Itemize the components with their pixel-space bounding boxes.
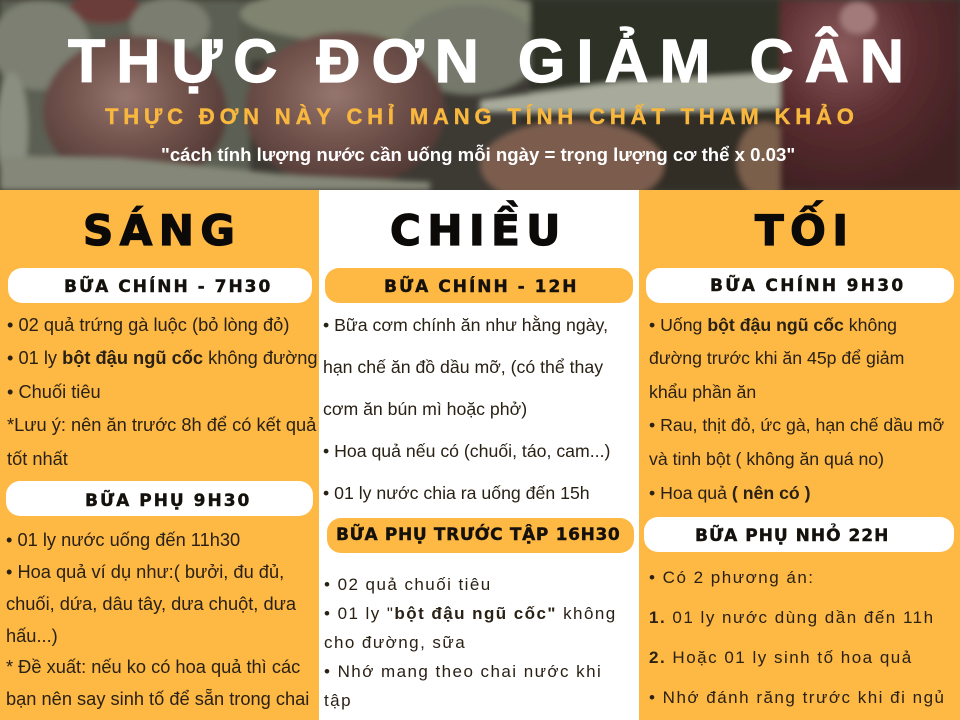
pill: afternoon snack: [327, 518, 634, 553]
text: morning snack: [6, 529, 309, 709]
pill label: evening snack: BỮA PHỤ NHỎ 22H: [695, 526, 889, 546]
text: morning snack: • Hoa quả ví dụ như:( bưởi, đu đủ,: [6, 561, 284, 582]
text: morning main meal: tốt nhất: [7, 448, 68, 469]
subtitle: THỰC ĐƠN NÀY CHỈ MANG TÍNH CHẤT THAM KHẢO: [105, 104, 859, 129]
text: afternoon snack: • Nhớ mang theo chai nước khi: [324, 662, 602, 681]
pill: morning snack: [6, 481, 313, 516]
pill: afternoon main meal: [325, 268, 633, 303]
text: morning snack: bạn nên say sinh tố để sẵn trong chai: [6, 688, 309, 709]
panel: morning: [0, 190, 319, 720]
text: evening snack: 1. 01 ly nước dùng dần đến 11h: [649, 608, 935, 627]
text: afternoon main meal: hạn chế ăn đồ dầu mỡ, (có thể thay: [323, 357, 603, 377]
text: morning snack: hấu...): [6, 625, 58, 646]
water formula note: "cách tính lượng nước cần uống mỗi ngày = trọng lượng cơ thể x 0.03": [161, 144, 795, 165]
heading: evening: TỐI: [755, 206, 854, 255]
heading: morning: SÁNG: [83, 206, 241, 255]
text: evening main meal: đường trước khi ăn 45p để giảm: [649, 348, 904, 368]
pill label: morning snack: BỮA PHỤ 9H30: [85, 491, 251, 511]
panel: evening: [639, 190, 960, 720]
text: evening main meal: • Rau, thịt đỏ, ức gà, hạn chế dầu mỡ: [649, 415, 944, 435]
text: evening snack: [649, 568, 945, 707]
header photo background: [0, 0, 960, 190]
text: morning main meal: • Chuối tiêu: [7, 381, 101, 402]
pill label: afternoon snack: BỮA PHỤ TRƯỚC TẬP 16H30: [336, 525, 620, 545]
text: evening snack: • Nhớ đánh răng trước khi đi ngủ: [649, 688, 945, 707]
text: evening main meal: và tinh bột ( không ăn quá no): [649, 449, 884, 469]
text: afternoon snack: tập: [324, 691, 352, 710]
pill label: evening main meal: BỮA CHÍNH 9H30: [710, 276, 906, 296]
text: afternoon snack: • 01 ly "bột đậu ngũ cốc" không: [324, 604, 617, 623]
text: afternoon main meal: • Bữa cơm chính ăn như hằng ngày,: [323, 315, 608, 335]
text: afternoon snack: [324, 575, 617, 710]
panel: evening: • Hoa quả ( nên có ): [649, 483, 811, 503]
text: afternoon main meal: [323, 315, 610, 503]
text: evening snack: • Có 2 phương án:: [649, 568, 815, 587]
text: morning main meal: • 02 quả trứng gà luộc (bỏ lòng đỏ): [7, 314, 289, 335]
text: evening snack: 2. Hoặc 01 ly sinh tố hoa quả: [649, 648, 913, 667]
pill label: morning main meal: BỮA CHÍNH - 7H30: [64, 277, 272, 297]
pill: evening main meal: [646, 268, 954, 303]
pill label: afternoon main meal: BỮA CHÍNH - 12H: [384, 277, 578, 297]
text: morning main meal: *Lưu ý: nên ăn trước 8h để có kết quả: [7, 414, 316, 435]
text: afternoon snack: • 02 quả chuối tiêu: [324, 575, 492, 594]
text: evening main meal: khẩu phần ăn: [649, 382, 756, 402]
text: morning snack: * Đề xuất: nếu ko có hoa quả thì các: [6, 656, 300, 677]
panel: afternoon: • 01 ly nước chia ra uống đến 15h: [323, 483, 590, 503]
text: morning snack: chuối, dứa, dâu tây, dưa chuột, dưa: [6, 593, 296, 614]
title: THỰC ĐƠN GIẢM CÂN: [68, 27, 915, 95]
heading: afternoon: CHIỀU: [390, 206, 567, 255]
text: evening main meal: [649, 315, 944, 503]
pill: evening snack: [644, 517, 954, 552]
text: morning main meal: [7, 314, 318, 469]
panel: afternoon: [319, 190, 639, 720]
pill: morning main meal: [8, 268, 312, 303]
text: evening main meal: • Uống bột đậu ngũ cốc không: [649, 315, 897, 335]
text: afternoon main meal: cơm ăn bún mì hoặc phở): [323, 399, 527, 419]
text: afternoon main meal: • Hoa quả nếu có (chuối, táo, cam...): [323, 441, 610, 461]
text: morning main meal: • 01 ly bột đậu ngũ cốc không đường: [7, 347, 318, 368]
text: morning snack: • 01 ly nước uống đến 11h30: [6, 529, 240, 550]
text: afternoon snack: cho đường, sữa: [324, 633, 466, 652]
